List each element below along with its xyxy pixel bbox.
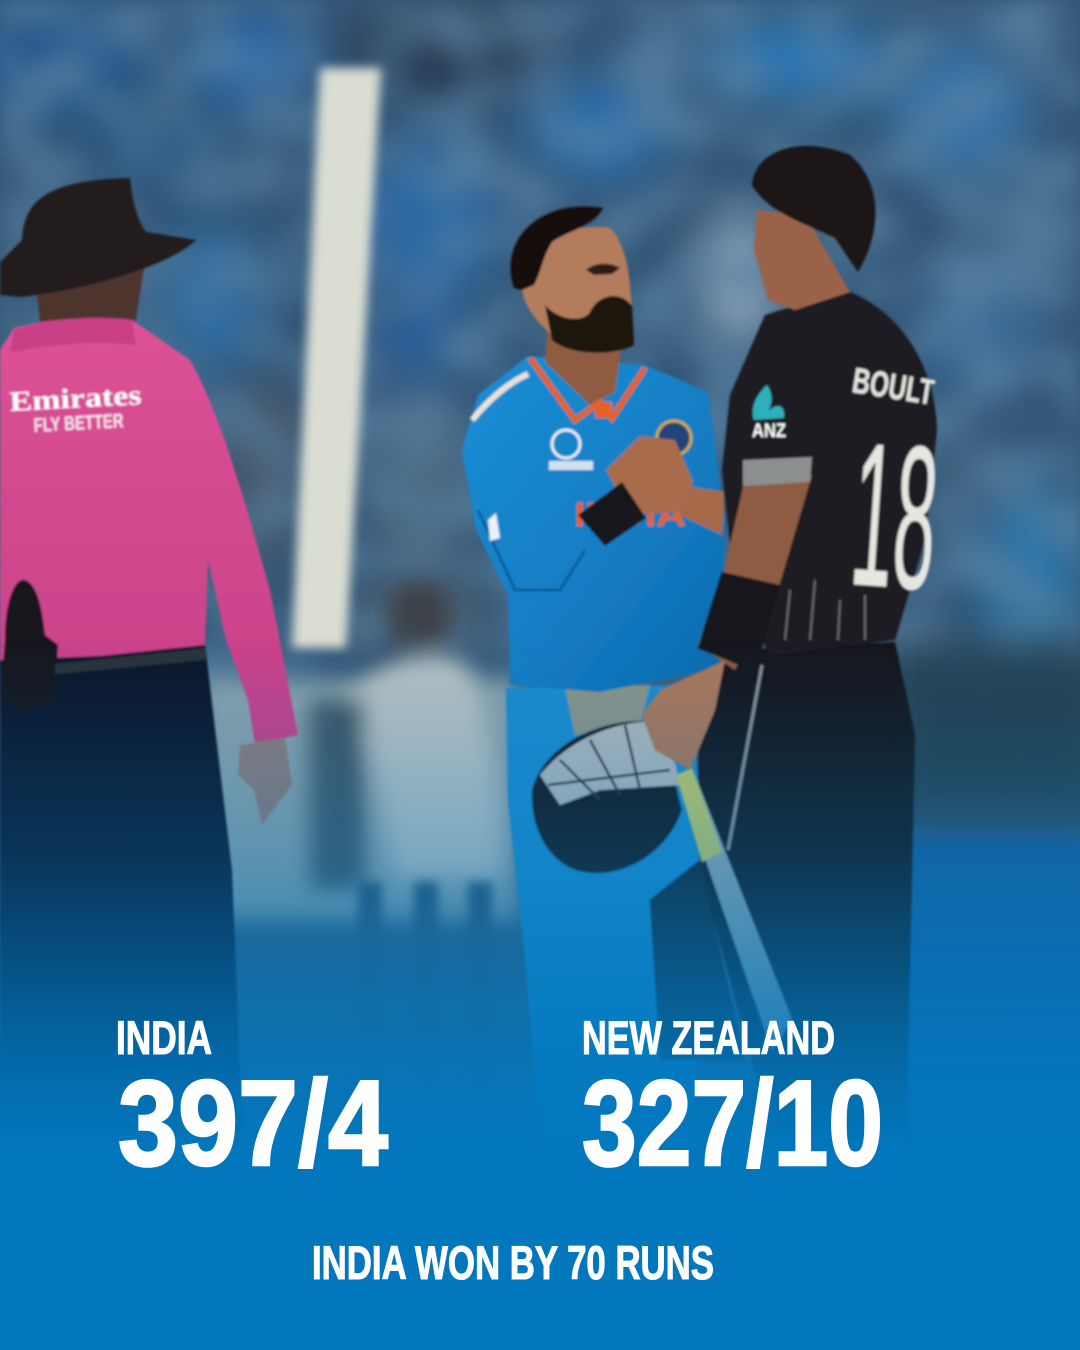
- light ground left: [200, 680, 520, 920]
- sleeve stripes: [488, 513, 500, 541]
- World Cup logo: [549, 430, 593, 470]
- neck and face: [754, 210, 850, 310]
- umpire in pink shirt: [0, 178, 298, 1200]
- team label: India: INDIA: [116, 1011, 212, 1064]
- crowd mottling: [0, 0, 1080, 800]
- beard and moustache: [545, 296, 634, 353]
- hair: [752, 146, 875, 272]
- blue boundary strip: [860, 838, 1080, 1138]
- sleeve fold: [478, 510, 585, 590]
- shirt lower pattern: [785, 580, 865, 640]
- team label: New Zealand: NEW ZEALAND: [582, 1011, 835, 1064]
- eye: [586, 264, 620, 275]
- bat: [676, 768, 792, 1050]
- clasped hands: [606, 436, 693, 514]
- umpire hand: [238, 738, 292, 825]
- shirt name: BOULT: [850, 359, 937, 413]
- undershirt shade: [565, 685, 650, 735]
- umpire microphone pack: [0, 580, 58, 712]
- forearm: [680, 485, 725, 535]
- umpire neck and hair: [36, 262, 145, 325]
- wrist band: [698, 572, 780, 672]
- hair: [511, 207, 603, 290]
- trouser piping: [728, 665, 762, 850]
- India trousers: [506, 685, 705, 1200]
- bat colours: [676, 768, 722, 862]
- black shirt: [722, 290, 937, 655]
- umpire pink shirt: [0, 318, 298, 745]
- bat shadow: [650, 860, 745, 1060]
- helmet grille: [540, 721, 680, 805]
- Boult in New Zealand shirt: [642, 146, 945, 1200]
- umpire collar shade: [10, 318, 136, 352]
- black wristband: [578, 482, 646, 546]
- umpire belt: [55, 648, 206, 674]
- blue gradient overlay: [0, 640, 1080, 1350]
- orange placket: [595, 402, 612, 418]
- grey sleeve band: [743, 457, 812, 486]
- sponsor text: Emirates: [9, 380, 142, 418]
- BCCI badge: [657, 421, 691, 455]
- orange collar: [530, 358, 645, 420]
- head: [522, 227, 632, 346]
- black trousers: [698, 642, 915, 1200]
- shoulder stripes: [472, 374, 528, 420]
- ANZ: ANZ: [752, 421, 786, 442]
- umpire hat: [0, 178, 196, 297]
- India shirt: [462, 356, 725, 692]
- dark lower stands: [880, 650, 1080, 820]
- lower hand: [642, 660, 725, 770]
- score: India: 397/4: [118, 1055, 388, 1191]
- score: New Zealand: 327/10: [582, 1055, 883, 1191]
- shirt name: INDIA: [574, 496, 686, 534]
- neck: [545, 325, 622, 405]
- raised arm: [698, 475, 812, 670]
- Kohli in India shirt: [462, 207, 725, 1200]
- blurred spectator in white: [310, 585, 501, 890]
- blurred white pole: [292, 68, 381, 648]
- umpire trousers: [0, 645, 245, 1200]
- result line: INDIA WON BY 70 RUNS: [312, 1236, 714, 1289]
- blurred stumps: [358, 882, 492, 1082]
- sponsor strapline: FLY BETTER: [33, 410, 125, 437]
- helmet: [532, 721, 682, 873]
- fern logo: [753, 385, 784, 420]
